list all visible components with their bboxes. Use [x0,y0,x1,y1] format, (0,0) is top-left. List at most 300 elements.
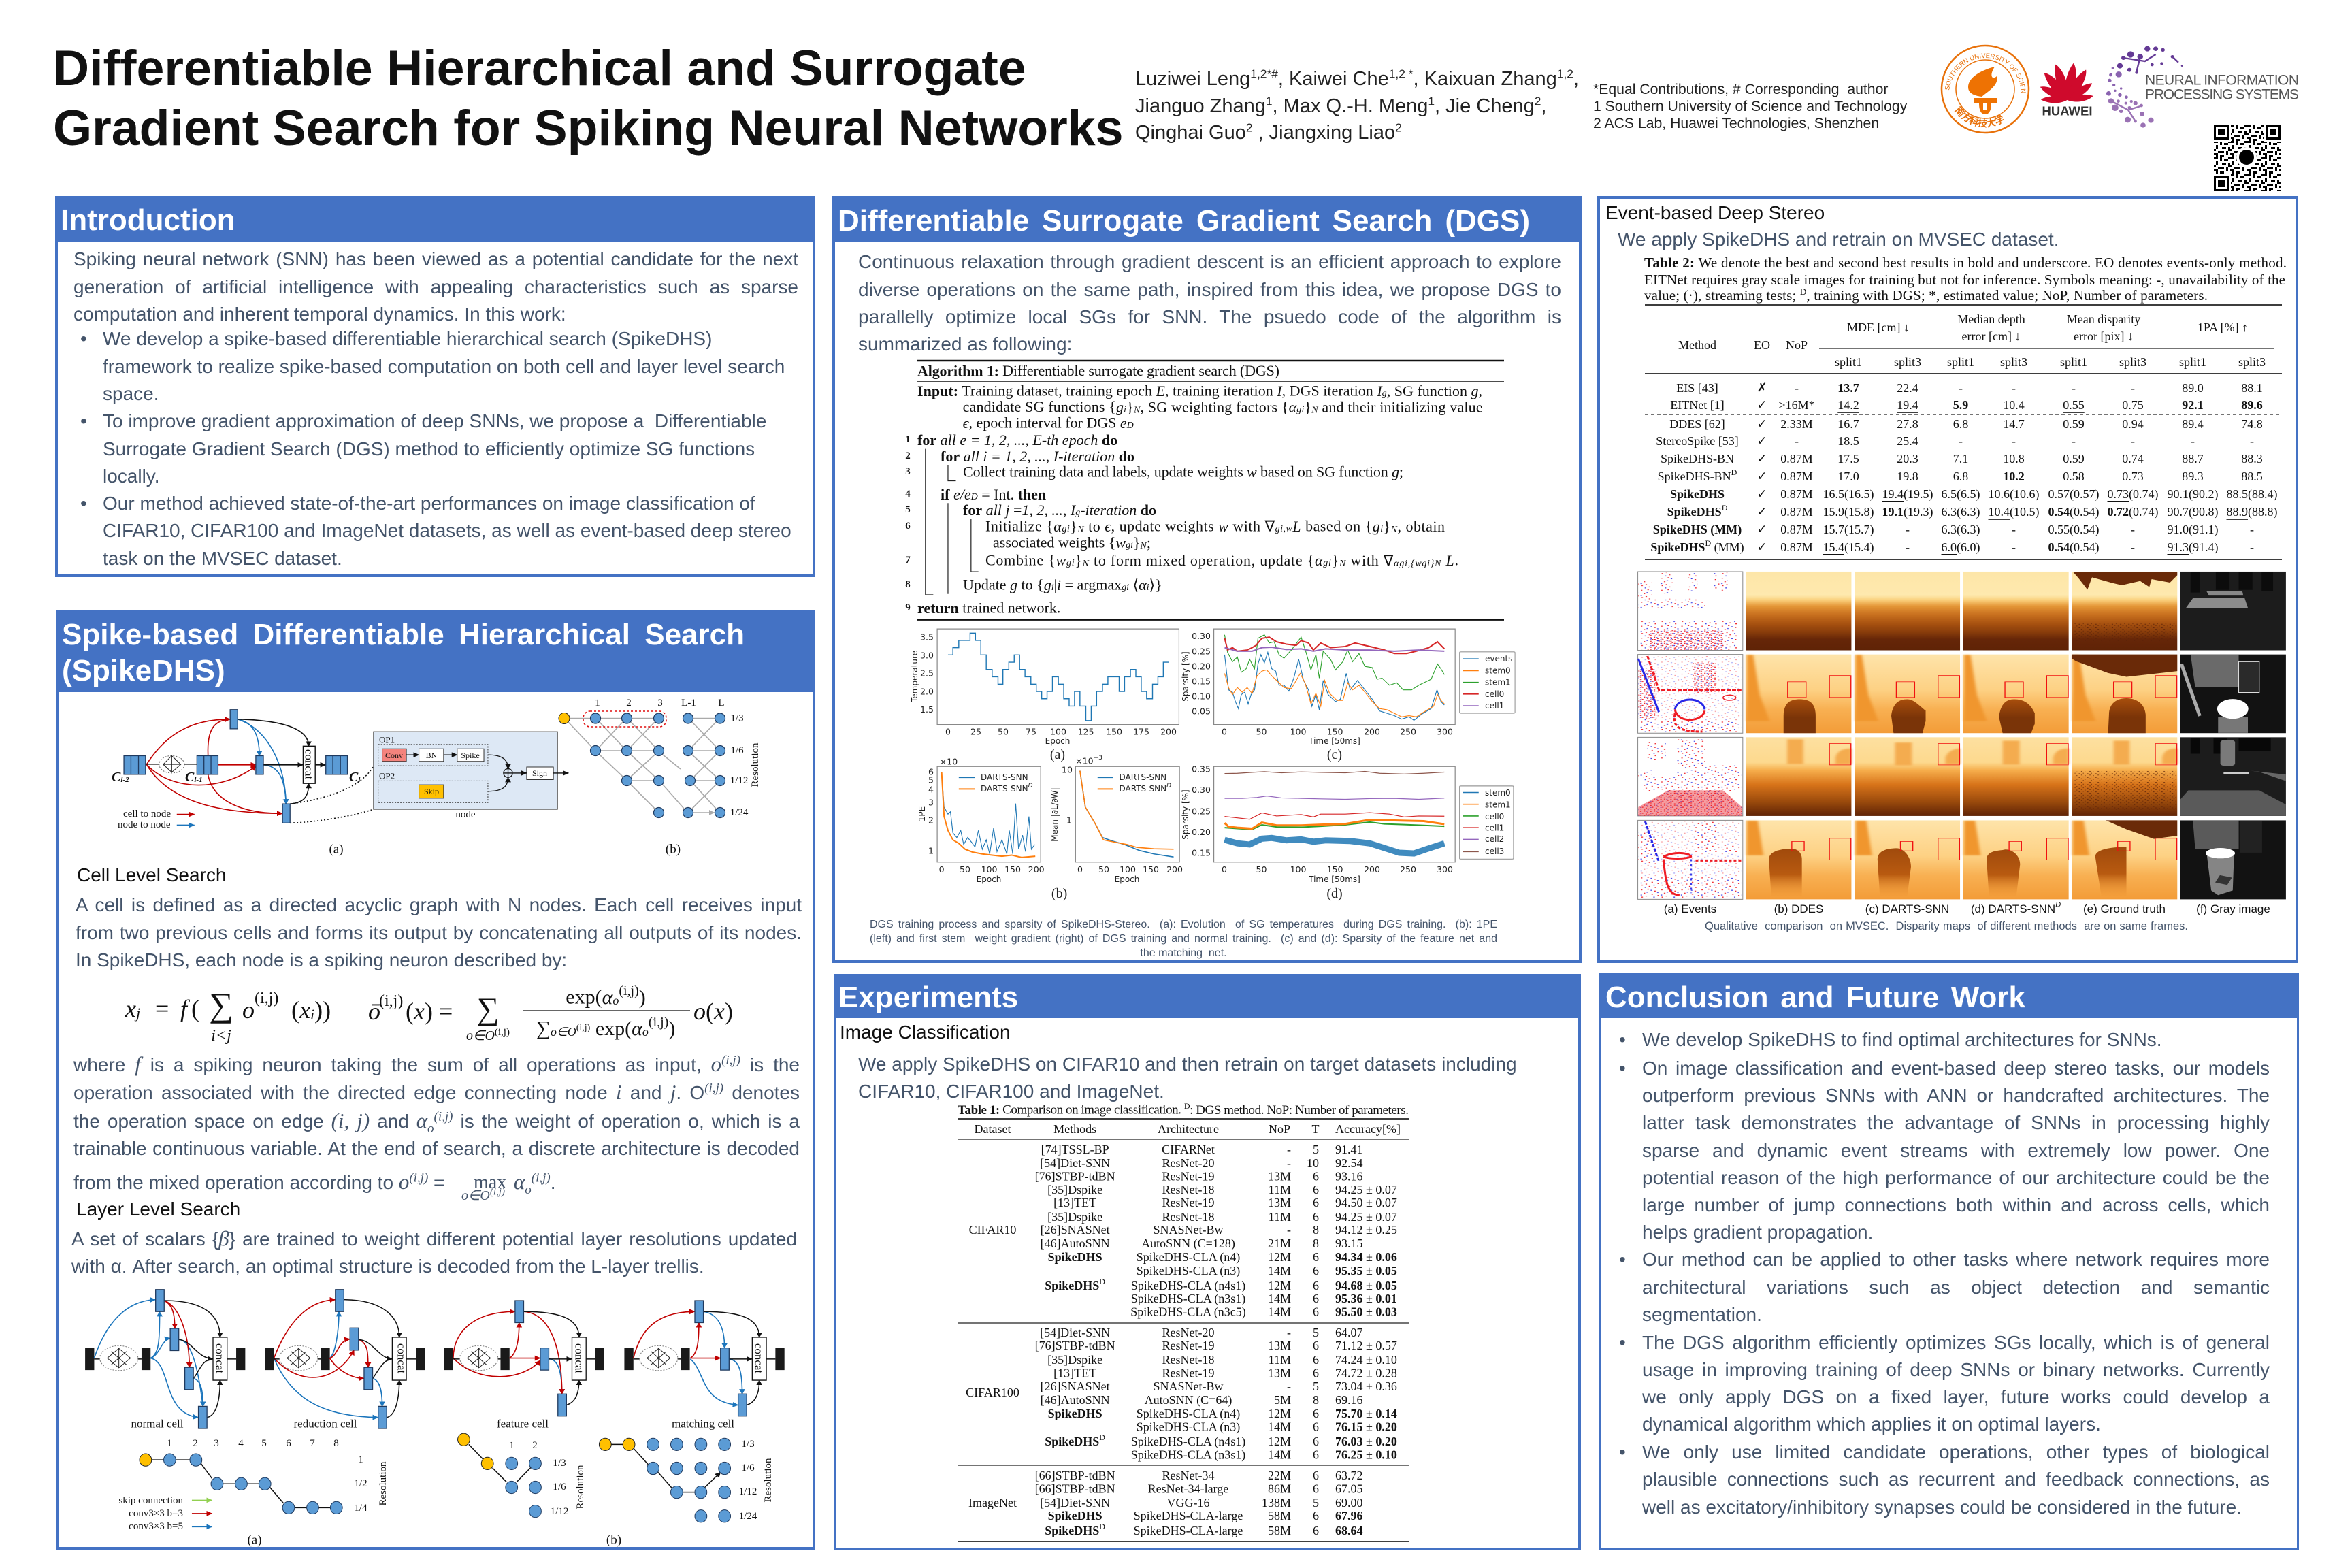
caption: DGS figure [870,919,1497,959]
row: StereoSpike: StereoSpike [53] [1656,434,1739,448]
row: SpikeDHS-BN: 0.74 [2122,452,2144,466]
panel: experiments [834,974,1581,1550]
row: SpikeDHS-BN: 17.5 [1838,452,1859,466]
image column labels: (c) DARTS-SNN [1865,902,1949,915]
panel: DGS [832,196,1582,963]
chart (d): matching net sparsity: 0.15 [1192,848,1211,858]
chart (b): 1PE and gradient: 50 [960,864,970,875]
row: SpikeDHS MM: 91.0(91.1) [2167,523,2219,537]
algorithm box: N [1133,405,1141,415]
searched layer structures: 1/3 [741,1439,755,1450]
row: SpikeDHS: 19.4(19.5) [1882,487,1933,502]
table 1: Table 1: Comparison on image classification. [958,1102,1181,1117]
T column: 6 [1313,1524,1319,1537]
cell diagram (a): OP1 [379,735,395,745]
text: introduction body: Our method achieved state-of-the-art performances on image classification of [103,493,755,514]
row: StereoSpike: - [1795,434,1799,448]
T column: 6 [1313,1469,1319,1482]
methods column: [26]SNASNet [1041,1379,1110,1393]
algorithm box: to form mixed operation, update { [1090,551,1314,569]
diagram: searched cells and layers [85,1289,785,1548]
chart (b): 1PE and gradient: 200 [1028,864,1045,875]
chart (a): temperature: 175 [1133,727,1149,736]
row: EIS [1676,381,2263,395]
algorithm box: i = argmax [1057,576,1122,593]
algorithm box: ϵ, update weights w with ∇ [1105,517,1275,535]
equations: (x) = [406,998,453,1025]
searched layer structures: 1/12 [739,1486,757,1497]
accuracy column: 71.12 ± 0.57 [1335,1339,1397,1352]
equations: i [310,1006,314,1022]
heading: SpikeDHS: Spike-based Differentiable Hierarchical Search [62,618,745,651]
accuracy column: 69.16 [1335,1393,1362,1407]
logo: Neural Information Processing Systems: PROCESSING SYSTEMS [2145,87,2299,102]
T column: 6 [1313,1448,1319,1462]
text: cell description [76,894,802,970]
row: SpikeDHS-BN with DGS: 0.87M [1780,470,1813,483]
architecture column: SpikeDHS-CLA (n3) [1137,1264,1240,1278]
row: DDES: 0.94 [2122,417,2144,431]
text: conclusion bullets: outperform previous SNNs with ANN or handcrafted architectures. The [1642,1085,2270,1106]
architecture column: ResNet-19 [1162,1196,1214,1209]
affiliations [1593,82,1907,131]
table 2: 1PA [%] ↑ [2198,321,2248,334]
algorithm box: , SG function [1387,382,1471,399]
text: conclusion bullets: We develop SpikeDHS to find optimal architectures for SNNs. [1642,1029,2162,1050]
algorithm box: = Int. [978,486,1018,502]
chart (c): feature net sparsity: (c) [1327,747,1342,762]
searched layer structures: Resolution [575,1465,586,1509]
row: DDES: 2.33M [1780,417,1813,431]
table 2: Median depth [1957,312,2025,326]
chart (a): temperature: 150 [1106,727,1122,736]
cells: reduction cell [294,1417,357,1431]
cell diagram (a): node to node [118,819,171,830]
chart (c): feature net sparsity: 100 [1290,727,1306,736]
text: conclusion bullets: • [1619,1058,1626,1079]
accuracy column: 94.25 ± 0.07 [1335,1183,1397,1196]
chart (c): feature net sparsity: 0 [1222,727,1227,736]
NoP column: - [1287,1156,1291,1170]
text: conclusion bullets: potential reason of the high performance of our architecture could be the [1642,1167,2270,1188]
architecture column: ResNet-18 [1162,1183,1214,1196]
chart (c): feature net sparsity: 0.20 [1192,662,1211,671]
row: SpikeDHS MM: ✓ [1757,523,1767,536]
text: conclusion bullets: plausible connections such as recurrent and feedback connections, as [1642,1469,2270,1490]
row: SpikeDHS-BN: 88.7 [2182,452,2204,466]
row: DDES: 6.8 [1953,417,1968,431]
T column: 6 [1313,1250,1319,1264]
row: EITNet: 89.6 [2241,398,2263,412]
row: EIS: 13.7 [1838,381,1859,395]
algorithm box: gi [1296,404,1304,414]
accuracy column: 63.72 [1335,1469,1362,1482]
algorithm box: gi [1122,583,1129,592]
row: SpikeDHS with DGS [1667,503,2277,519]
searched layer structures: conv3×3 b=5 [129,1521,183,1532]
cells: normal cell [131,1417,184,1431]
row: SpikeDHS MM with DGS: - [2012,540,2016,554]
text: DGS intro: Continuous relaxation through gradient descent is an efficient approach to explore [858,251,1561,272]
T column: 6 [1313,1305,1319,1319]
accuracy column: 67.96 [1335,1509,1362,1522]
chart (b): 1PE and gradient: Epoch [977,875,1001,884]
algorithm box: } [1384,517,1390,535]
table 2: error [pix] ↓ [2074,329,2134,343]
row: EITNet: 19.4 [1897,398,1918,412]
text: conclusion bullets: segmentation. [1642,1304,1762,1325]
cells: concat [214,1343,226,1373]
equations: o∈O [466,1028,495,1043]
algorithm box: } [1332,551,1339,569]
row: DDES: 16.7 [1838,417,1859,431]
accuracy column: 74.72 ± 0.28 [1335,1367,1397,1380]
searched layer structures: 1 [167,1438,172,1449]
chart (b): 1PE and gradient: 0 [939,864,945,875]
chart (b): 1PE and gradient: 50 [1098,864,1109,875]
methods column: [54]Diet-SNN [1040,1496,1110,1509]
architecture column: SpikeDHS-CLA-large [1134,1524,1243,1537]
chart (c): feature net sparsity: events [1485,654,1512,664]
chart (d): matching net sparsity [1181,764,1514,901]
row: SpikeDHS-BN: 7.1 [1953,452,1968,466]
algorithm box: 3 [905,466,911,477]
row: SpikeDHS: 0.73(0.74) [2107,487,2159,502]
searched layer structures: Resolution [378,1461,389,1506]
architecture column: SpikeDHS-CLA (n3c5) [1130,1305,1246,1319]
architecture column: ResNet-34 [1162,1469,1214,1482]
searched layer structures: 2 [532,1440,538,1451]
algorithm box: 7 [905,555,911,566]
algorithm box: 2 [905,451,911,461]
accuracy column: 95.36 ± 0.01 [1335,1292,1397,1305]
NoP column: 138M [1262,1496,1291,1509]
equations: )) [314,996,331,1024]
NoP column: 11M [1269,1353,1291,1367]
algorithm box: Update g to {g [963,576,1051,593]
chart (b): 1PE and gradient: 2 [928,815,934,825]
row: SpikeDHS-BN: ✓ [1757,452,1767,466]
algorithm box: for all i = 1, 2, ..., I-iteration do [941,448,1134,464]
methods column: [46]AutoSNN [1041,1237,1110,1250]
equations: o [642,1025,649,1039]
row: SpikeDHS MM: SpikeDHS (MM) [1653,523,1742,537]
row: SpikeDHS-BN with DGS: 6.8 [1953,470,1968,483]
image column labels [1664,901,2270,915]
trellis diagram (b): 1/6 [730,745,744,756]
trellis diagram (b): L [718,698,725,708]
trellis diagram (b) [559,698,761,856]
logo: Huawei [2040,63,2093,118]
row: EIS: EIS [43] [1676,381,1718,395]
algorithm box: Collect training data and labels, update weights w based on SG function g; [963,463,1403,480]
text: stereo intro: We apply SpikeDHS and retrain on MVSEC dataset. [1618,229,2059,250]
NoP column: 58M [1268,1524,1291,1537]
subheading: event-based deep stereo: Event-based Deep Stereo [1605,202,1825,223]
architecture column: SpikeDHS-CLA (n4) [1137,1250,1240,1264]
chart (b): 1PE and gradient: Mean |∂L/∂W| [1050,787,1060,842]
table 2 [1644,255,2287,560]
row: EITNet: 10.4 [2003,398,2025,412]
chart (a): temperature: 2.0 [920,686,934,697]
row: SpikeDHS [1670,487,2277,502]
chart (c): feature net sparsity: cell0 [1485,689,1504,699]
chart (d): matching net sparsity: (d) [1326,886,1343,901]
chart (c): feature net sparsity: 50 [1256,727,1267,736]
text: conclusion bullets: helps gradient propagation. [1642,1222,1873,1243]
algorithm box: i [1380,524,1383,534]
row 2 images [1638,655,2286,733]
cell diagram (a): C [185,770,194,785]
chart (a): temperature [910,629,1179,762]
row: SpikeDHS: 10.6(10.6) [1989,487,2039,502]
methods column: SpikeDHS [1045,1524,1099,1537]
searched layer structures: 1/2 [354,1478,368,1489]
row: SpikeDHS-BN with DGS: 0.73 [2122,470,2144,483]
table 2: split1 [1947,355,1974,369]
text: introduction body: To improve gradient approximation of deep SNNs, we propose a Differentiable [103,410,766,431]
NoP column: - [1287,1143,1291,1156]
chart (d): matching net sparsity: stem1 [1485,800,1511,810]
row: SpikeDHS MM with DGS: - [2250,540,2254,554]
text: experiments intro: CIFAR10, CIFAR100 and ImageNet. [858,1081,1164,1102]
text: operation description: αo(i,j). [514,1170,556,1197]
text: cell description: from two previous cells and forms its output by concatenating all outputs of its nodes. [76,922,802,943]
NoP column: - [1287,1379,1291,1393]
NoP column: 14M [1268,1305,1291,1319]
row: SpikeDHS-BN with DGS: 88.5 [2241,470,2263,483]
table 2: Mean disparity [2067,312,2140,326]
heading: SpikeDHS: (SpikeDHS) [62,654,225,687]
text: cell description: A cell is defined as a directed acyclic graph with N nodes. Each cell receives input [76,894,802,915]
cell diagram (a): l-1 [194,776,203,784]
image column labels: (d) DARTS-SNN [1971,902,2055,915]
cell diagram (a) [112,710,568,856]
panel: SpikeDHS [56,610,815,1550]
chart (b): 1PE and gradient: ×10 [940,757,958,766]
algorithm box: 6 [905,521,911,532]
cells: matching cell [672,1417,734,1431]
text: conclusion bullets: On image classification and event-based deep stereo tasks, our models [1642,1058,2270,1079]
table 2: split3 [2000,355,2027,369]
equations: (i,j) [576,1022,591,1033]
row: SpikeDHS with DGS: SpikeDHS [1667,505,1722,519]
row: EIS: 22.4 [1897,381,1918,395]
chart (d): matching net sparsity: Time [50ms] [1308,875,1360,884]
NoP column: 58M [1268,1509,1291,1522]
table 1: Methods [1054,1122,1096,1136]
searched layer structures: 1/24 [739,1511,757,1522]
cell diagram (a): cell to node [123,808,171,819]
T column: 8 [1313,1393,1319,1407]
row: SpikeDHS: ✓ [1757,487,1767,501]
chart (b): 1PE and gradient: DARTS-SNN [981,772,1028,782]
NoP column: - [1287,1326,1291,1339]
algorithm box: gi [1066,558,1075,568]
searched layer structures: 1/6 [741,1463,755,1473]
architecture column: SpikeDHS-CLA (n3s1) [1131,1448,1245,1463]
chart (b): 1PE and gradient: 4 [928,784,934,795]
searched layer structures [118,1433,774,1548]
NoP column: - [1287,1223,1291,1237]
text: introduction body: task on the MVSEC dataset. [103,548,342,569]
methods column: [66]STBP-tdBN [1035,1482,1115,1496]
chart (b): 1PE and gradient: 10 [1062,765,1073,774]
accuracy column: 94.68 ± 0.05 [1335,1279,1397,1292]
chart (a): temperature: 3.5 [920,632,934,642]
chart (b): 1PE and gradient: 150 [1004,864,1021,875]
equations: i<j [211,1027,231,1045]
NoP column: 5M [1274,1393,1291,1407]
table 1: : DGS method. NoP: Number of parameters. [1190,1102,1409,1117]
row: SpikeDHS-BN with DGS: 0.58 [2063,470,2085,483]
T column: 6 [1313,1482,1319,1496]
row: SpikeDHS with DGS: 90.7(90.8) [2167,505,2219,519]
chart (c): feature net sparsity: 0.30 [1192,631,1211,641]
row: SpikeDHS MM with DGS: D [1705,538,1711,548]
methods column: SpikeDHS [1048,1250,1102,1264]
text: conclusion bullets: The DGS algorithm efficiently optimizes SGs locally, which is of general [1642,1332,2270,1353]
architecture column: AutoSNN (C=128) [1141,1237,1235,1251]
architecture column: ResNet-18 [1162,1353,1214,1367]
chart (d): matching net sparsity: 0.20 [1192,827,1211,837]
methods column: [46]AutoSNN [1041,1393,1110,1407]
table 1: Dataset [975,1122,1011,1136]
T column: 5 [1313,1326,1319,1339]
row: SpikeDHS: 90.1(90.2) [2167,487,2219,502]
methods column: SpikeDHS [1045,1435,1099,1448]
architecture column: SNASNet-Bw [1153,1223,1224,1237]
architecture column: AutoSNN (C=64) [1145,1393,1232,1407]
algorithm box: gi [1323,558,1331,568]
algorithm box: N [1082,558,1090,569]
text: operation description: o∈O(i,j) [461,1186,505,1203]
subheading: layer level search: Layer Level Search [76,1198,240,1220]
NoP column: 12M [1268,1407,1291,1420]
T column: 8 [1313,1223,1319,1237]
caption: DGS figure: DGS training process and sparsity of SpikeDHS-Stereo. (a): Evolution of SG temperatures during DGS training. (b): 1PE [870,919,1497,930]
text: introduction body: • [80,493,87,514]
cells: concat [753,1343,765,1373]
row: SpikeDHS with DGS: 19.1(19.3) [1882,505,1933,519]
NoP column: 14M [1268,1420,1291,1433]
chart (b): 1PE and gradient: −3 [1094,755,1102,762]
algorithm box: α [1315,551,1331,569]
row: StereoSpike: 25.4 [1897,434,1918,448]
row 3 images [1638,737,2286,816]
cells: concat [395,1343,408,1373]
searched layer structures: 6 [286,1438,291,1449]
row: SpikeDHS with DGS: 10.4(10.5) [1989,505,2039,519]
table 2: Table 2: We denote the best and second best results in bold and underscore. EO denotes events-only method. [1644,255,2287,271]
row: SpikeDHS-BN with DGS: 17.0 [1838,470,1859,483]
cell diagram (a): C [349,770,358,785]
trellis diagram (b): (b) [666,843,681,856]
text: conclusion bullets: sparse and dynamic event streams with extremely low power. One [1642,1140,2270,1161]
searched layer structures: 1/3 [553,1458,566,1469]
algorithm box: } [1126,398,1134,415]
equations: ) [668,1017,675,1040]
cells [85,1290,785,1431]
NoP column: 13M [1268,1169,1291,1183]
text: conclusion bullets: well as excitatory/inhibitory synapses could be considered in the future. [1642,1497,2242,1518]
row: SpikeDHS MM: - [1906,523,1910,536]
text: cell description: In SpikeDHS, each node is a spiking neuron described by: [76,949,567,970]
cell diagram (a): (a) [329,843,344,856]
methods column: [26]SNASNet [1041,1223,1110,1237]
text: conclusion bullets: large number of jump connections both within and across cells, which [1642,1194,2270,1215]
T column: 8 [1313,1237,1319,1250]
equations: exp(α [566,985,612,1009]
text: introduction body: • [80,410,87,431]
heading: DGS: Differentiable Surrogate Gradient Search (DGS) [838,204,1530,238]
text: experiments intro: We apply SpikeDHS on CIFAR10 and then retrain on target datasets including [858,1054,1517,1075]
charts: DGS training and sparsity [910,629,1516,901]
row: EITNet: 0.75 [2122,398,2144,412]
row: SpikeDHS-BN with DGS: 19.8 [1897,470,1918,483]
NoP column: 13M [1268,1339,1291,1352]
algorithm box: } [1070,517,1077,535]
equations [125,983,733,1045]
text: operation description: operation associated with the directed edge connecting node i and j. O(i,j) denotes [74,1080,800,1104]
accuracy column: 75.70 ± 0.14 [1335,1407,1397,1420]
chart (b): 1PE and gradient: 0 [1077,864,1083,875]
chart (b): 1PE and gradient: 5 [928,774,934,785]
chart (d): matching net sparsity: 250 [1400,864,1416,875]
row: DDES: 74.8 [2241,417,2263,431]
chart (a): temperature: 25 [970,727,981,736]
T column: 6 [1313,1279,1319,1292]
text: conclusion bullets: • [1619,1249,1626,1270]
accuracy column: 76.03 ± 0.20 [1335,1435,1397,1448]
chart (b): 1PE and gradient: 1PE [917,806,927,821]
row: SpikeDHS-BN: 20.3 [1897,452,1918,466]
chart (a): temperature: Epoch [1045,736,1070,746]
chart (d): matching net sparsity: 0.25 [1192,806,1211,817]
row: StereoSpike: - [1959,434,1963,448]
cell diagram (a): C [112,770,120,785]
row: SpikeDHS MM with DGS: 0.87M [1780,540,1813,554]
equations: = [155,995,169,1022]
panel: introduction [55,196,815,577]
algorithm box: L [1441,551,1454,569]
searched layer structures: 4 [238,1438,244,1449]
row: SpikeDHS: 0.57(0.57) [2048,487,2099,502]
NoP column: 12M [1268,1250,1291,1264]
text: operation description: the operation space on edge (i, j) and αo(i,j) is the weight of operation o, which is a [74,1109,800,1136]
architecture column: CIFARNet [1162,1143,1215,1156]
equations: (i,j) [649,1015,668,1030]
algorithm box: | [1054,576,1057,593]
heading: conclusion: Conclusion and Future Work [1605,981,2025,1014]
row: SpikeDHS MM with DGS: SpikeDHS [1650,540,1705,554]
T column: 6 [1313,1196,1319,1209]
row: SpikeDHS with DGS: 0.72(0.74) [2107,505,2159,519]
chart (d): matching net sparsity: 0 [1222,864,1227,875]
chart (b): 1PE and gradient: DARTS-SNN [1119,772,1166,782]
table 1: Accuracy[%] [1335,1122,1401,1136]
accuracy column: 69.00 [1335,1496,1362,1509]
chart (d): matching net sparsity: 50 [1256,864,1267,875]
chart (a): temperature: 0 [945,727,951,736]
row: SpikeDHS with DGS: 88.9(88.8) [2227,505,2277,519]
chart (a): temperature: 50 [998,727,1009,736]
row: EITNet: 0.55 [2063,398,2085,412]
logo: Neural Information Processing Systems [2106,46,2299,128]
table 1: NoP [1269,1122,1290,1136]
chart (b): 1PE and gradient: Epoch [1115,875,1139,884]
table 2: split1 [2179,355,2206,369]
